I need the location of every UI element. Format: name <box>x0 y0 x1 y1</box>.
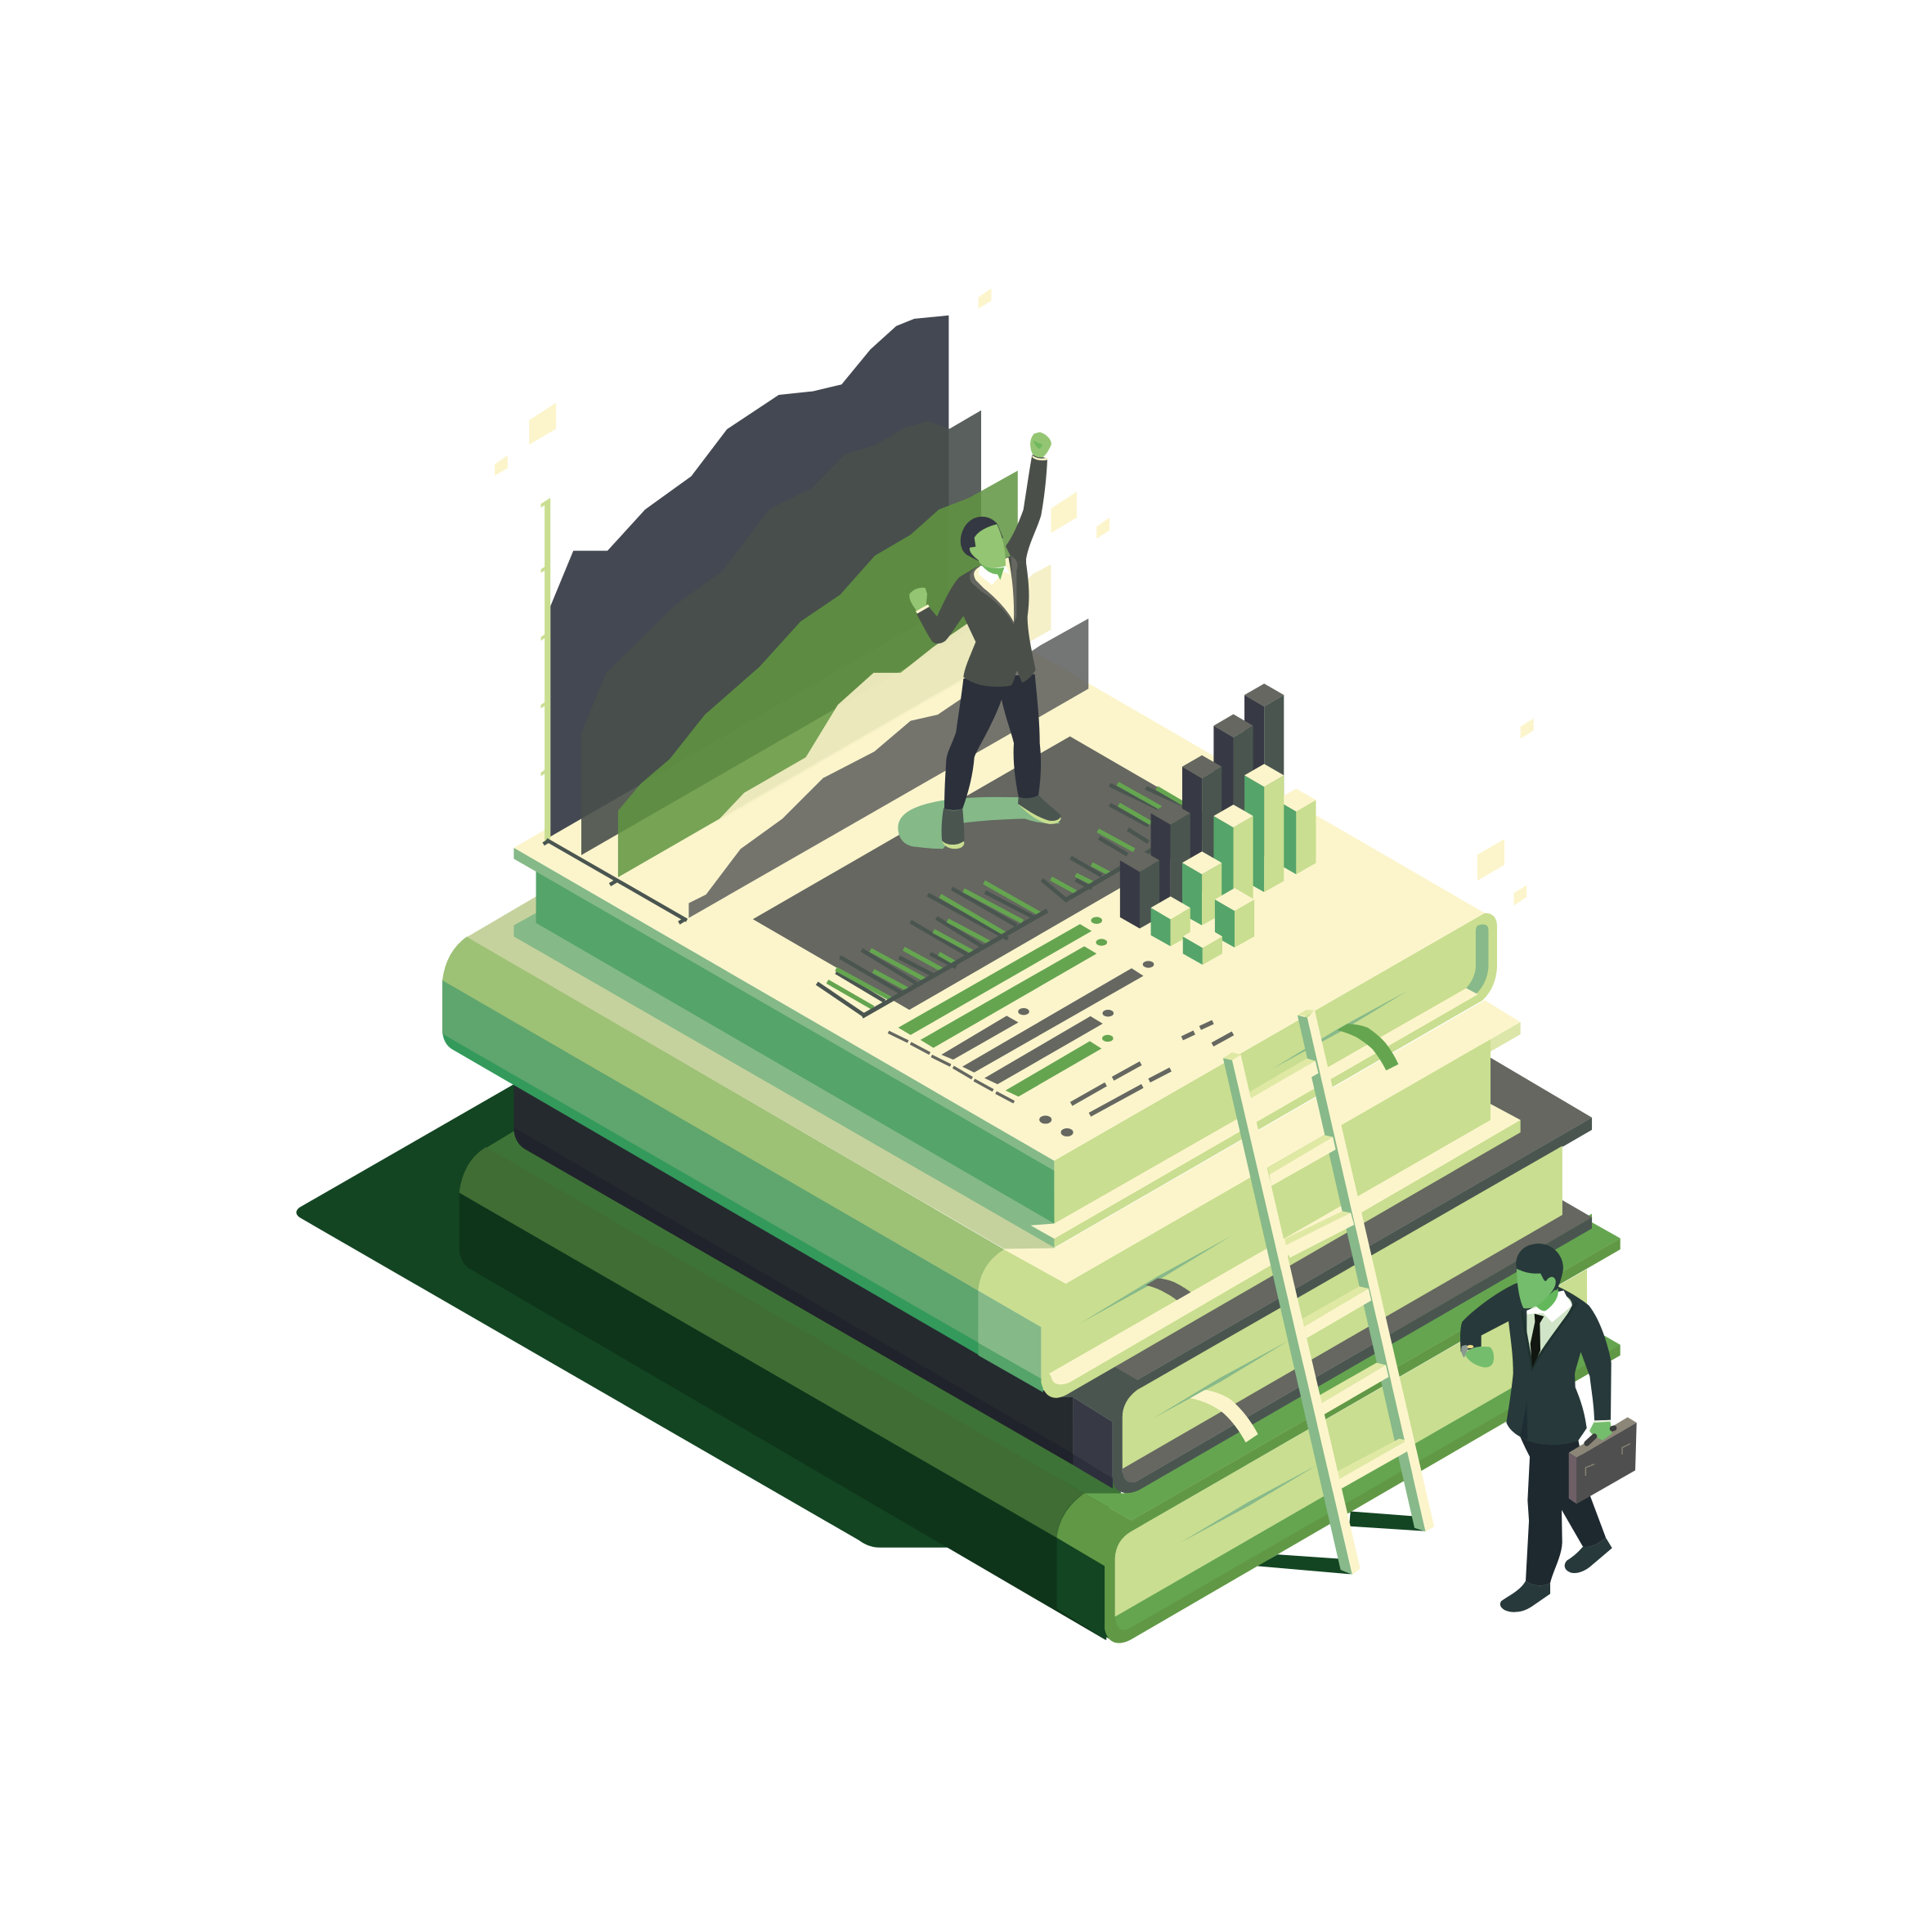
chart y axis <box>541 498 550 843</box>
woman shirt <box>974 558 1014 622</box>
bottom book front cover <box>1057 1239 1620 1643</box>
dark column A <box>1244 684 1284 856</box>
man lapel line <box>1522 1302 1576 1368</box>
cream bookmark ribbon <box>1190 1390 1258 1442</box>
bottom book <box>459 1131 1620 1643</box>
bottom book spine <box>459 1193 1105 1640</box>
woman lowered fist <box>909 588 927 611</box>
woman with raised fist <box>898 433 1061 849</box>
third book <box>442 896 1521 1398</box>
ladder right rail front <box>1307 1011 1434 1531</box>
ladder <box>1223 1010 1434 1575</box>
ladder left rail cap <box>1223 1052 1241 1060</box>
top book page slit <box>1272 991 1408 1069</box>
third book lower cover band <box>1049 1104 1521 1384</box>
third book shadowed strip <box>467 896 1055 1249</box>
man neck <box>1535 1288 1558 1311</box>
grey area layer front <box>688 619 1088 918</box>
green column K <box>1151 896 1190 946</box>
bottom book shaded top cover <box>486 1131 1121 1494</box>
woman neck <box>979 563 1004 580</box>
top book cream band <box>1030 988 1478 1239</box>
ladder rungs <box>1250 1059 1407 1488</box>
list axis dashes <box>889 1032 1014 1102</box>
bottom book lit top cover <box>1084 1213 1620 1521</box>
man face <box>1517 1269 1556 1308</box>
dark column C <box>1182 755 1222 892</box>
bottom book pages <box>1115 1269 1587 1616</box>
dark book spine <box>513 1084 1074 1465</box>
chart x axis <box>544 840 687 923</box>
man watch face <box>1467 1345 1473 1348</box>
woman face <box>970 524 1006 567</box>
grey area layer <box>581 410 981 855</box>
pale area layer <box>715 564 1051 823</box>
green column I <box>1182 851 1222 926</box>
briefcase handle <box>1587 1428 1614 1443</box>
third book spine band <box>442 1029 1043 1392</box>
dark book inner cover <box>1123 1200 1592 1482</box>
fist shading <box>1033 441 1042 449</box>
small bar chart green bars <box>827 783 1183 1008</box>
man watch band <box>1461 1345 1469 1358</box>
green column J <box>1215 888 1254 948</box>
woman hair <box>961 517 1003 562</box>
bottom book page slit <box>1181 1465 1317 1543</box>
third book cover corner <box>979 1290 1041 1378</box>
woman floor shadow <box>898 797 1060 849</box>
dark book page slit <box>1154 1341 1289 1419</box>
third book top lip <box>1490 1022 1521 1051</box>
woman raised fist <box>1030 433 1051 458</box>
3D bar chart <box>1120 684 1316 965</box>
man hair <box>1516 1244 1563 1290</box>
small text dashes <box>1071 1022 1233 1114</box>
woman lapel <box>970 556 1018 625</box>
woman trousers <box>944 675 1041 810</box>
top book inner cover curve <box>1466 925 1488 994</box>
third book top cover <box>1003 1000 1521 1284</box>
dark book pages <box>1123 1146 1562 1468</box>
man collar <box>1526 1290 1572 1322</box>
bottom book inner cover <box>1115 1336 1620 1630</box>
list dots <box>1018 917 1154 1136</box>
dark book spine cover <box>1056 1118 1592 1493</box>
ladder right rail cap <box>1298 1010 1314 1016</box>
top book cover edge <box>513 848 1054 1171</box>
green column L <box>1183 925 1222 965</box>
man shoes <box>1500 1538 1612 1612</box>
third book front cover and pages <box>979 1038 1521 1398</box>
man with briefcase <box>1460 1244 1637 1612</box>
list bars <box>899 924 1144 1096</box>
green column F <box>1276 788 1316 874</box>
green area layer <box>618 471 1018 877</box>
navy area layer <box>550 316 948 836</box>
dark bar chart panel <box>753 737 1226 1010</box>
woman jacket <box>917 556 1036 687</box>
man cuff <box>1594 1420 1611 1423</box>
ladder right rail side <box>1298 1015 1426 1531</box>
small bar chart dark bars <box>817 785 1183 1016</box>
man briefcase hand <box>1589 1421 1612 1441</box>
dark column B <box>1213 714 1253 875</box>
third book page slit <box>1080 1236 1231 1323</box>
woman raised arm <box>1006 455 1047 566</box>
ground shadow <box>296 1084 1424 1638</box>
woman cuffs <box>916 455 1047 614</box>
woman collar <box>979 566 1010 585</box>
top book right pages <box>1054 913 1497 1248</box>
grey bookmark ribbon <box>1146 1278 1195 1304</box>
third book spine curve <box>442 936 1004 1290</box>
ladder left rail <box>1223 1058 1352 1575</box>
jacket shading <box>1520 1401 1527 1441</box>
top book spine <box>536 870 1054 1223</box>
man shirt <box>1526 1292 1572 1368</box>
area chart <box>541 316 1088 923</box>
dark column E <box>1120 849 1159 929</box>
top book lower cover strip <box>513 913 1055 1248</box>
dashboard on book cover <box>753 737 1233 1136</box>
bottom book shaded spine curve <box>459 1147 1084 1538</box>
man watch hand <box>1465 1347 1494 1367</box>
top book cover surface <box>513 600 1485 1161</box>
top book <box>513 600 1497 1248</box>
dark column D <box>1151 802 1190 911</box>
man tie <box>1531 1314 1544 1368</box>
woman shoes <box>942 804 1061 849</box>
man trousers <box>1519 1435 1606 1585</box>
dark book top cover <box>1084 1057 1592 1383</box>
small bar chart axis <box>862 839 1171 1016</box>
floating squares <box>495 289 1534 906</box>
briefcase <box>1569 1417 1637 1504</box>
green bookmark ribbon <box>1338 1024 1398 1070</box>
ladder left rail front <box>1232 1055 1360 1575</box>
green column G <box>1244 764 1284 892</box>
dark book <box>513 1057 1592 1493</box>
green column H <box>1213 805 1253 909</box>
man jacket <box>1460 1283 1611 1445</box>
